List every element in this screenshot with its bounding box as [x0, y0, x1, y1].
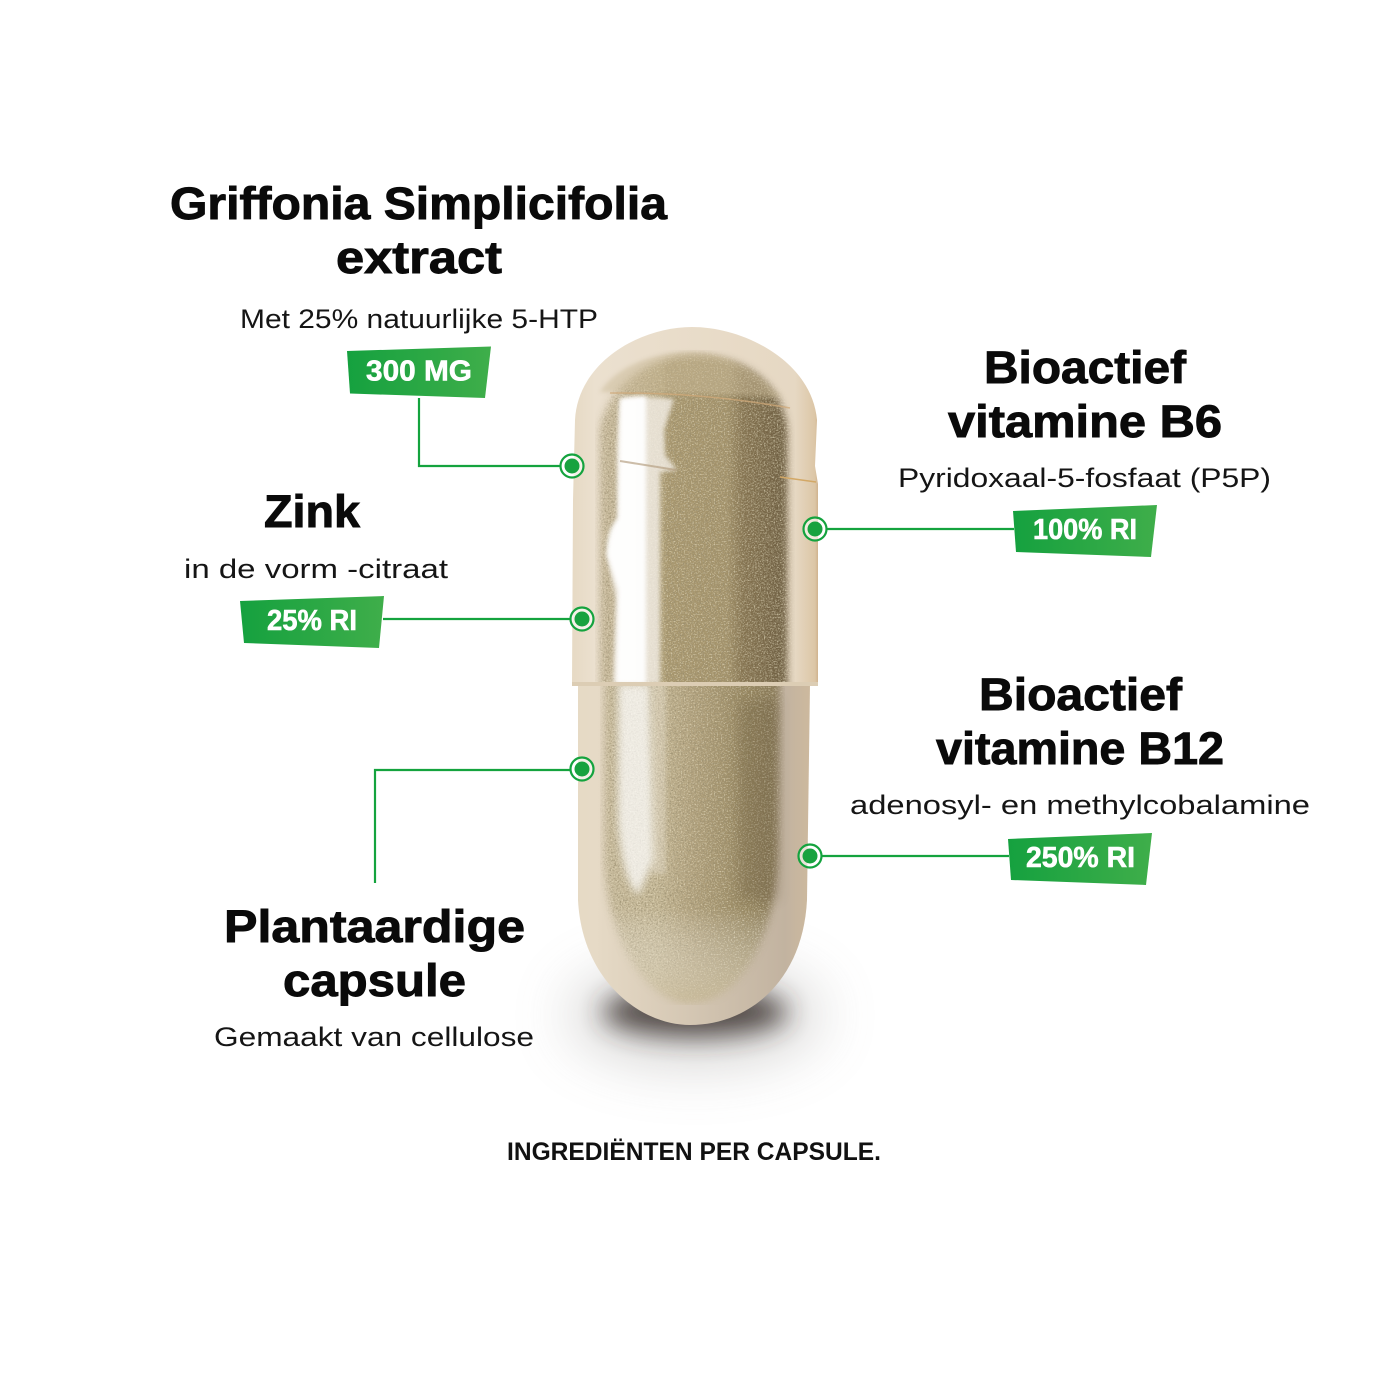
b6 heading: vitamine B6 [948, 396, 1222, 447]
b6 badge [1013, 505, 1157, 557]
zink connector [383, 608, 594, 630]
capsule rim [572, 682, 818, 686]
b12 badge: 250% RI [1026, 842, 1135, 874]
griffonia heading [170, 178, 668, 283]
griffonia heading: extract [336, 232, 502, 283]
capsule heading: Plantaardige [224, 901, 525, 952]
footnote: INGREDIËNTEN PER CAPSULE. [507, 1138, 881, 1166]
b12 heading [936, 669, 1224, 774]
label: plantaardige capsule [214, 758, 594, 1052]
label: zink [184, 486, 594, 648]
b6 subtitle: Pyridoxaal-5-fosfaat (P5P) [898, 463, 1271, 493]
capsule shadow [570, 967, 820, 1063]
label: vitamine b12 [798, 669, 1310, 885]
griffonia badge: 300 MG [366, 356, 472, 388]
zink subtitle: in de vorm -citraat [184, 554, 449, 584]
b12 subtitle: adenosyl- en methylcobalamine [850, 790, 1310, 820]
b12 badge [1008, 833, 1152, 885]
capsule upper cap [570, 325, 820, 685]
zink badge [240, 596, 384, 648]
label: vitamine b6 [804, 342, 1271, 557]
capsule heading [224, 901, 525, 1006]
capsule lower body [578, 686, 810, 1025]
b12 heading: Bioactief [979, 669, 1183, 720]
capsule photo [570, 325, 820, 1063]
zink heading: Zink [264, 486, 361, 537]
zink badge: 25% RI [267, 605, 357, 637]
b12 heading: vitamine B12 [936, 723, 1224, 774]
b6 heading [948, 342, 1222, 447]
capsule connector [375, 758, 594, 883]
b6 connector [804, 518, 1014, 540]
griffonia heading: Griffonia Simplicifolia [170, 178, 668, 229]
griffonia connector [419, 398, 584, 478]
griffonia badge [347, 346, 491, 398]
label: griffonia [170, 178, 668, 478]
capsule heading: capsule [283, 955, 466, 1006]
b12 connector [798, 844, 1009, 868]
capsule subtitle: Gemaakt van cellulose [214, 1022, 534, 1052]
b6 heading: Bioactief [984, 342, 1187, 393]
b6 badge: 100% RI [1033, 514, 1137, 546]
griffonia subtitle: Met 25% natuurlijke 5-HTP [240, 304, 598, 334]
